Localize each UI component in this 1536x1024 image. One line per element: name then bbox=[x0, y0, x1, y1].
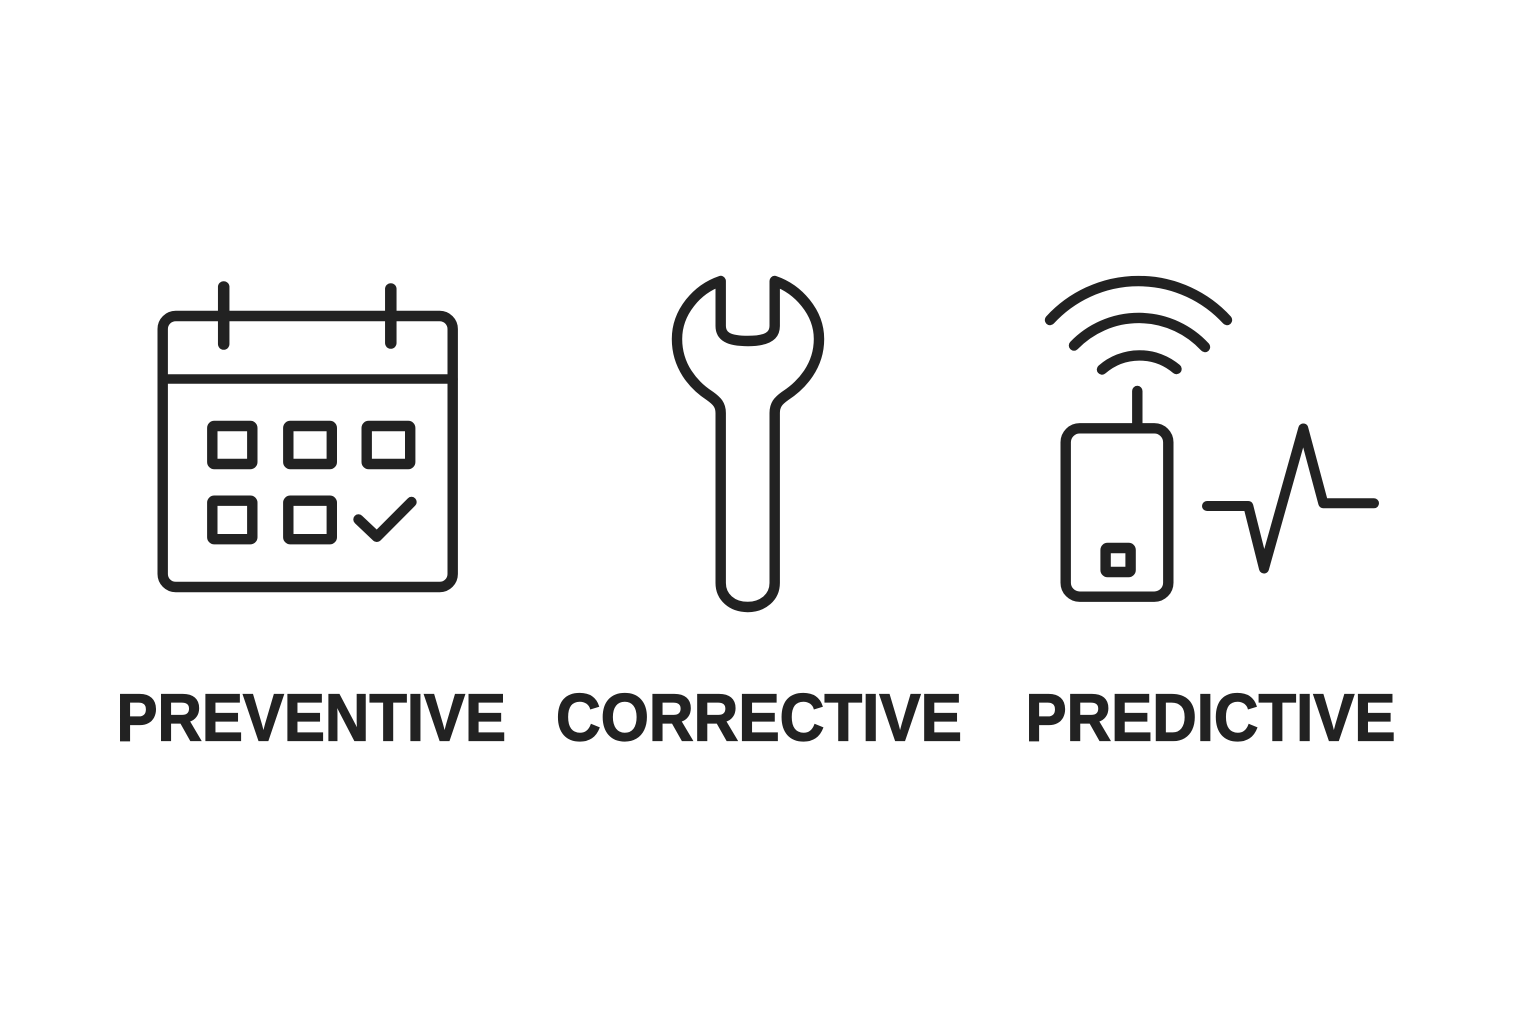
panel: corrective bbox=[556, 281, 962, 756]
heading: corrective: CORRECTIVE bbox=[556, 682, 962, 756]
panel: preventive bbox=[116, 287, 506, 756]
icon: wireless sensor device bbox=[1050, 281, 1227, 597]
panel: predictive bbox=[1026, 281, 1396, 756]
heading: predictive: PREDICTIVE bbox=[1026, 682, 1396, 756]
icon: pulse signal line bbox=[1207, 428, 1374, 568]
icon: calendar with check mark bbox=[163, 287, 453, 587]
heading: preventive: PREVENTIVE bbox=[116, 682, 506, 756]
icon: wrench bbox=[677, 281, 819, 607]
